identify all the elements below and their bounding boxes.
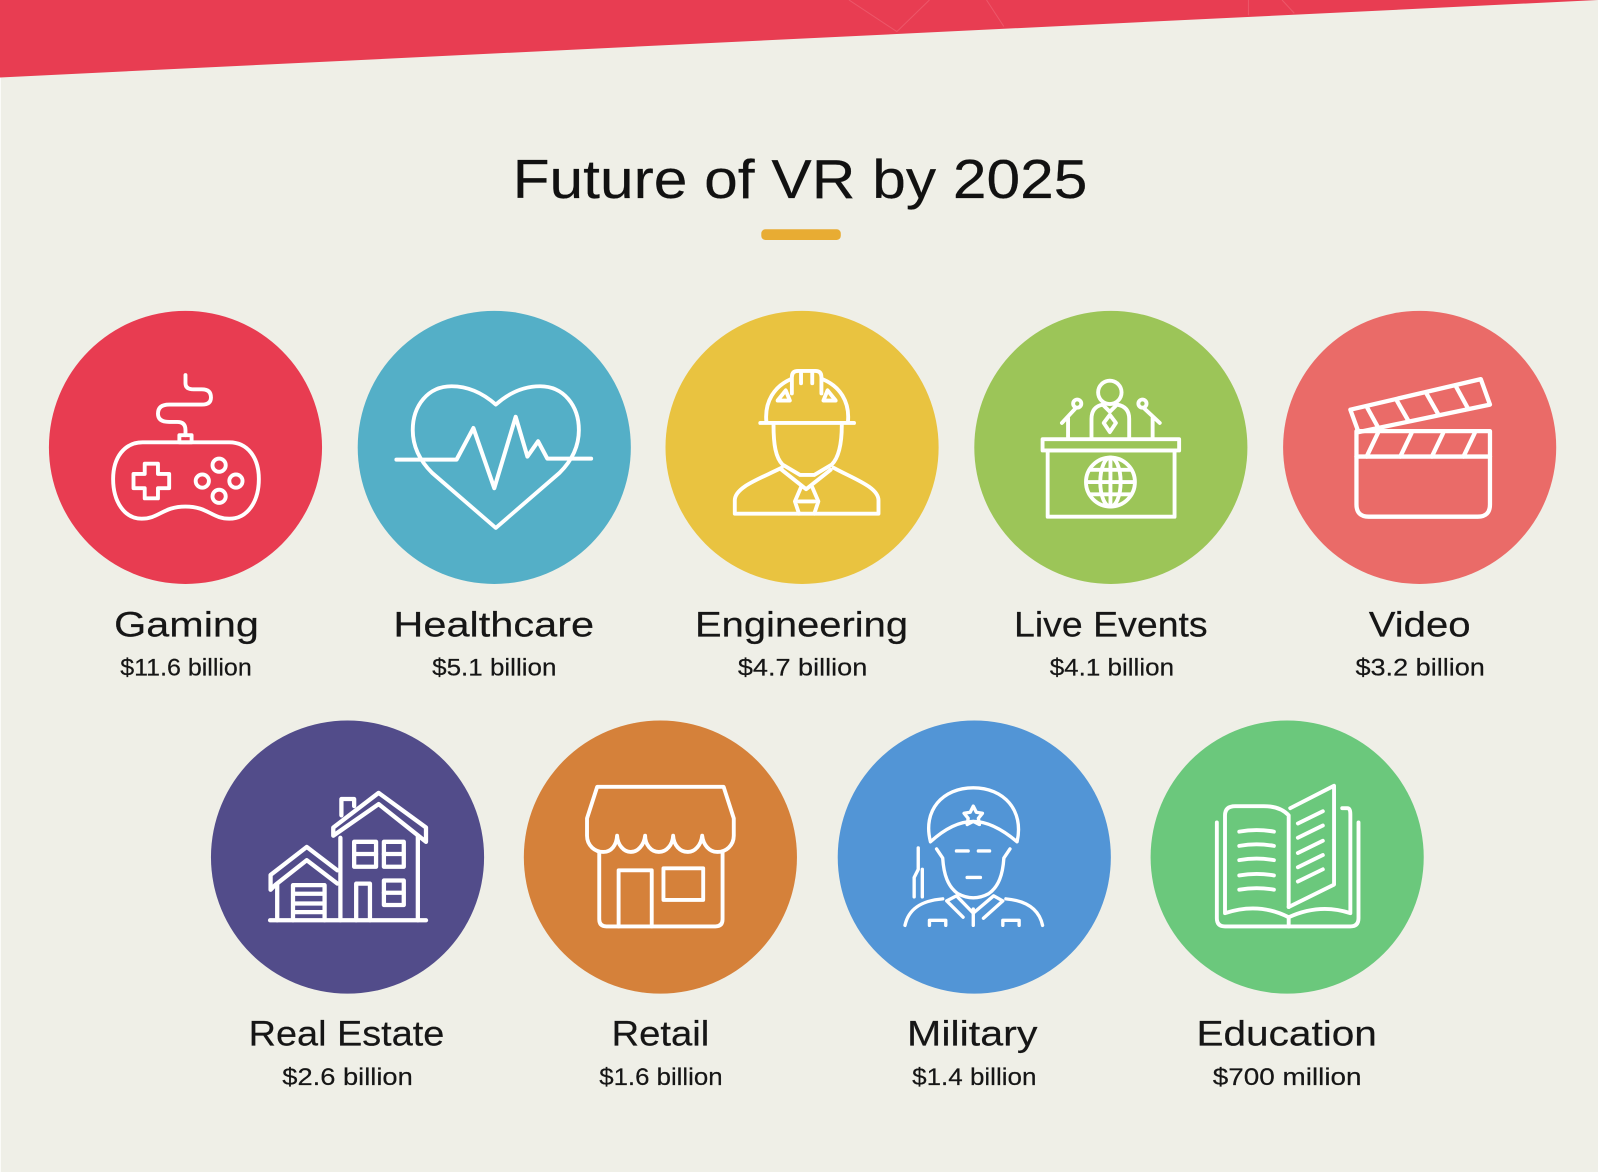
circle: gaming	[49, 311, 322, 584]
label: gaming: Gaming	[114, 606, 259, 645]
value: gaming: $11.6 billion	[120, 655, 252, 682]
label: education: Education	[1196, 1015, 1377, 1054]
icon: soldier	[905, 788, 1043, 925]
label: military: Military	[907, 1015, 1038, 1054]
icon: open book	[1217, 786, 1359, 926]
value: retail: $1.6 billion	[599, 1064, 723, 1091]
title underline accent	[761, 229, 841, 240]
circle: engineering	[665, 311, 939, 584]
circle: video	[1283, 311, 1556, 584]
value: engineering: $4.7 billion	[738, 655, 867, 682]
value: education: $700 million	[1213, 1064, 1362, 1091]
value: video: $3.2 billion	[1355, 655, 1485, 682]
label: live events: Live Events	[1014, 606, 1208, 645]
circle: military	[838, 721, 1111, 994]
label: retail: Retail	[611, 1015, 709, 1054]
icon: storefront	[587, 787, 734, 926]
circle: real estate	[211, 721, 484, 994]
top red banner	[0, 0, 1598, 77]
icon: speaker at podium	[1043, 381, 1179, 517]
icon: heart with pulse	[396, 386, 591, 528]
card: retail	[524, 721, 797, 1091]
icon: clapperboard	[1350, 379, 1490, 517]
circle: retail	[524, 721, 797, 994]
label: real estate: Real Estate	[249, 1015, 444, 1054]
value: real estate: $2.6 billion	[282, 1064, 413, 1091]
icon: houses	[270, 793, 426, 920]
circle: healthcare	[358, 311, 631, 584]
value: live events: $4.1 billion	[1050, 655, 1174, 682]
card: engineering	[665, 311, 939, 682]
circle: live events	[974, 311, 1247, 584]
value: military: $1.4 billion	[912, 1064, 1036, 1091]
icon: game controller	[113, 375, 259, 519]
label: engineering: Engineering	[695, 606, 908, 645]
card: education	[1151, 721, 1424, 1091]
label: healthcare: Healthcare	[393, 606, 594, 645]
card: real estate	[211, 721, 484, 1091]
icon: engineer with hard hat	[735, 371, 878, 514]
card: healthcare	[358, 311, 631, 682]
card: live events	[974, 311, 1247, 682]
title: Future of VR by 2025	[513, 148, 1087, 210]
card: military	[838, 721, 1111, 1091]
card: video	[1283, 311, 1556, 682]
circle: education	[1151, 721, 1424, 994]
label: video: Video	[1369, 606, 1471, 645]
value: healthcare: $5.1 billion	[432, 655, 556, 682]
card: gaming	[49, 311, 322, 682]
